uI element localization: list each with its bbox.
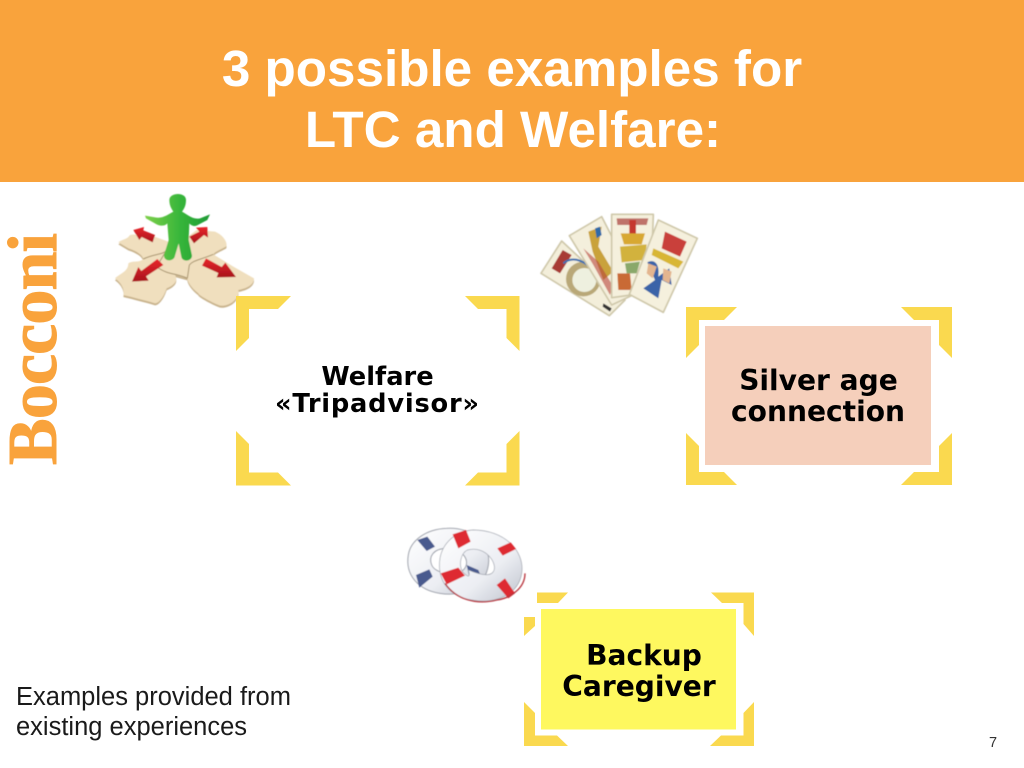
- box background: [541, 609, 736, 730]
- back ring: [408, 528, 489, 594]
- label: connection: [731, 395, 905, 428]
- card 3: [612, 214, 653, 298]
- card 1: [541, 241, 625, 316]
- panel: Backup Caregiver: [524, 592, 754, 746]
- card 4: [629, 220, 697, 312]
- label: [275, 362, 479, 419]
- card 2: [569, 217, 640, 305]
- corner brackets: [236, 296, 520, 486]
- label: Backup: [586, 639, 702, 672]
- footnote: existing experiences: [16, 713, 247, 741]
- icon: fan of playing cards: [541, 214, 697, 316]
- title: [222, 40, 802, 158]
- corner brackets: [524, 592, 754, 746]
- label: Caregiver: [562, 670, 716, 703]
- title: 3 possible examples for: [222, 40, 802, 97]
- label: «Tripadvisor»: [275, 389, 479, 419]
- box background: [705, 326, 931, 465]
- label: [731, 364, 905, 428]
- icon: red arrows: [132, 227, 236, 282]
- header band: [0, 0, 1024, 182]
- panel: Welfare Tripadvisor: [236, 296, 520, 486]
- corner brackets: [686, 307, 952, 485]
- panel: Silver age connection: [686, 307, 952, 485]
- title: LTC and Welfare:: [305, 101, 721, 158]
- label: Welfare: [321, 362, 434, 392]
- icon: green figure: [145, 194, 210, 261]
- label: [562, 639, 716, 703]
- footnote: Examples provided from: [16, 683, 291, 711]
- icon: green figure on puzzle with red arrows: [115, 194, 254, 308]
- page number: 7: [989, 735, 997, 751]
- icon: pair of life rings: [408, 528, 525, 602]
- front ring: [439, 530, 525, 602]
- label: Silver age: [739, 364, 898, 397]
- footnote: [16, 683, 291, 741]
- icon: puzzle base: [115, 230, 254, 308]
